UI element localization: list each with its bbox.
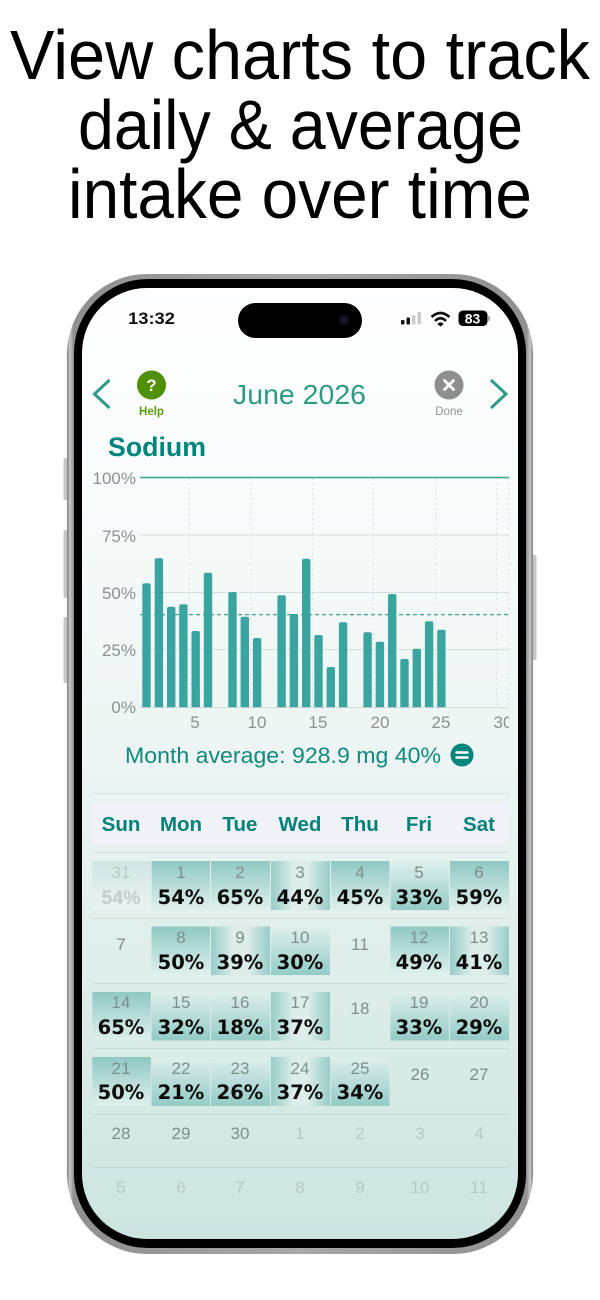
week 6: 8 [295,1178,305,1197]
week 5: 1 [295,1124,305,1143]
average dashed line [140,614,509,616]
week 4: 37% [277,1081,323,1104]
grid lines [140,478,509,708]
y axis labels: 25% [102,641,136,660]
weekday header: Sun [102,813,140,836]
week 2: 7 [116,935,126,954]
week 1: 3 [295,863,305,882]
row dividers [92,794,509,1168]
week 2: 13 [470,928,488,947]
week 1: 59% [456,886,502,909]
weekday header: Thu [341,813,379,836]
weekday header: Mon [160,813,202,836]
month label: June 2026 [233,379,366,410]
phone mockup [64,274,536,1254]
week 2: 50% [158,951,204,974]
phone side buttons [64,458,536,683]
week 2: 10 [291,928,309,947]
week 5: 29 [172,1124,190,1143]
title: intake over time [68,155,532,233]
week 3: 65% [98,1016,144,1039]
week 6: 10 [411,1178,429,1197]
week 1: 54% [101,887,141,909]
week 1: 45% [337,886,383,909]
week 4: 21% [158,1081,204,1104]
x axis labels: 15 [309,713,327,732]
week 2: 41% [456,951,502,974]
next arrow [491,380,506,408]
x axis labels: 20 [371,713,389,732]
week 4: 27 [470,1065,488,1084]
week 1: 5 [414,863,424,882]
week 4 [92,1057,488,1106]
y axis labels: 50% [102,584,136,603]
month average summary: Month average: 928.9 mg 40% [125,743,441,768]
icon: equals badge [450,744,474,766]
week 4: 26 [411,1065,429,1084]
week 3: 15 [172,993,190,1012]
week 2: 11 [351,935,369,954]
week 6: 11 [470,1178,488,1197]
battery icon [458,310,490,326]
week 3: 20 [470,993,488,1012]
signal icon [401,312,421,324]
phone frame [67,274,533,1254]
week 3 [92,992,509,1040]
week 2: 9 [235,928,245,947]
done button [434,370,464,418]
week 2: 39% [217,951,263,974]
week 5 [112,1124,484,1143]
week 3: 29% [456,1016,502,1039]
status bar [128,303,490,338]
week 2: 12 [410,928,428,947]
week 3: 33% [396,1016,442,1039]
week 5: 4 [474,1124,484,1143]
week 1: 31 [112,863,130,882]
week 1: 44% [277,886,323,909]
week 5: 3 [415,1124,425,1143]
weekday header: Sat [463,813,495,836]
y axis labels: 100% [93,469,136,488]
x axis labels: 25 [432,713,450,732]
week 3: 32% [158,1016,204,1039]
week 2: 30% [277,951,323,974]
calendar [92,794,509,1197]
wifi icon [432,313,450,326]
x axis labels: 10 [248,713,266,732]
week 1: 4 [355,863,365,882]
dynamic island [238,303,362,338]
daily bars [142,558,446,707]
week 4: 24 [291,1059,309,1078]
week 2: 8 [176,928,186,947]
x axis labels [191,716,509,728]
week 6: 6 [176,1178,186,1197]
week 3: 18 [351,999,369,1018]
week 2 [116,926,509,975]
week 5: 28 [112,1124,130,1143]
week 6: 9 [355,1178,365,1197]
y axis labels: 0% [111,698,136,717]
help button [137,370,166,418]
week 4: 25 [351,1059,369,1078]
week 3: 16 [231,993,249,1012]
weekday header: Wed [279,813,321,836]
week 4: 26% [217,1081,263,1104]
week 4: 22 [172,1059,190,1078]
week 1: 33% [396,886,442,909]
week 5: 30 [231,1124,249,1143]
week 6: 5 [116,1178,126,1197]
battery icon: 83 [465,310,480,326]
week 1: 6 [474,863,484,882]
week 3: 18% [217,1016,263,1039]
week 1 [92,861,509,910]
help button: ? [146,376,157,395]
y axis labels: 75% [102,527,136,546]
week 3: 37% [277,1016,323,1039]
week 4: 34% [337,1081,383,1104]
weekday header: Fri [406,813,432,836]
month navigation header [94,370,506,418]
bar chart [93,469,512,732]
week 1: 1 [176,863,186,882]
week 4: 23 [231,1059,249,1078]
week 6: 7 [235,1178,245,1197]
title [10,16,591,233]
title: daily & average [78,86,523,164]
week 5: 2 [355,1124,365,1143]
week 1: 2 [235,863,245,882]
nutrient heading: Sodium [108,432,206,462]
previous arrow [94,380,110,408]
week 3: 14 [112,993,130,1012]
week 6 [116,1178,488,1197]
week 2: 49% [396,951,442,974]
week 1: 65% [217,886,263,909]
week 4: 21 [112,1059,130,1078]
phone screen [82,288,518,1239]
week 4: 50% [98,1081,144,1104]
help button: Help [139,406,164,418]
x axis labels: 5 [190,713,200,732]
clock: 13:32 [128,309,175,328]
week 3: 19 [410,993,428,1012]
weekday header: Tue [223,813,257,836]
weekday header [92,803,509,845]
100 percent goal line [140,476,509,478]
y axis labels [93,469,136,717]
week 1: 54% [158,886,204,909]
done button: Done [435,406,463,418]
x axis labels: 30 [494,713,512,732]
week 3: 17 [291,993,309,1012]
